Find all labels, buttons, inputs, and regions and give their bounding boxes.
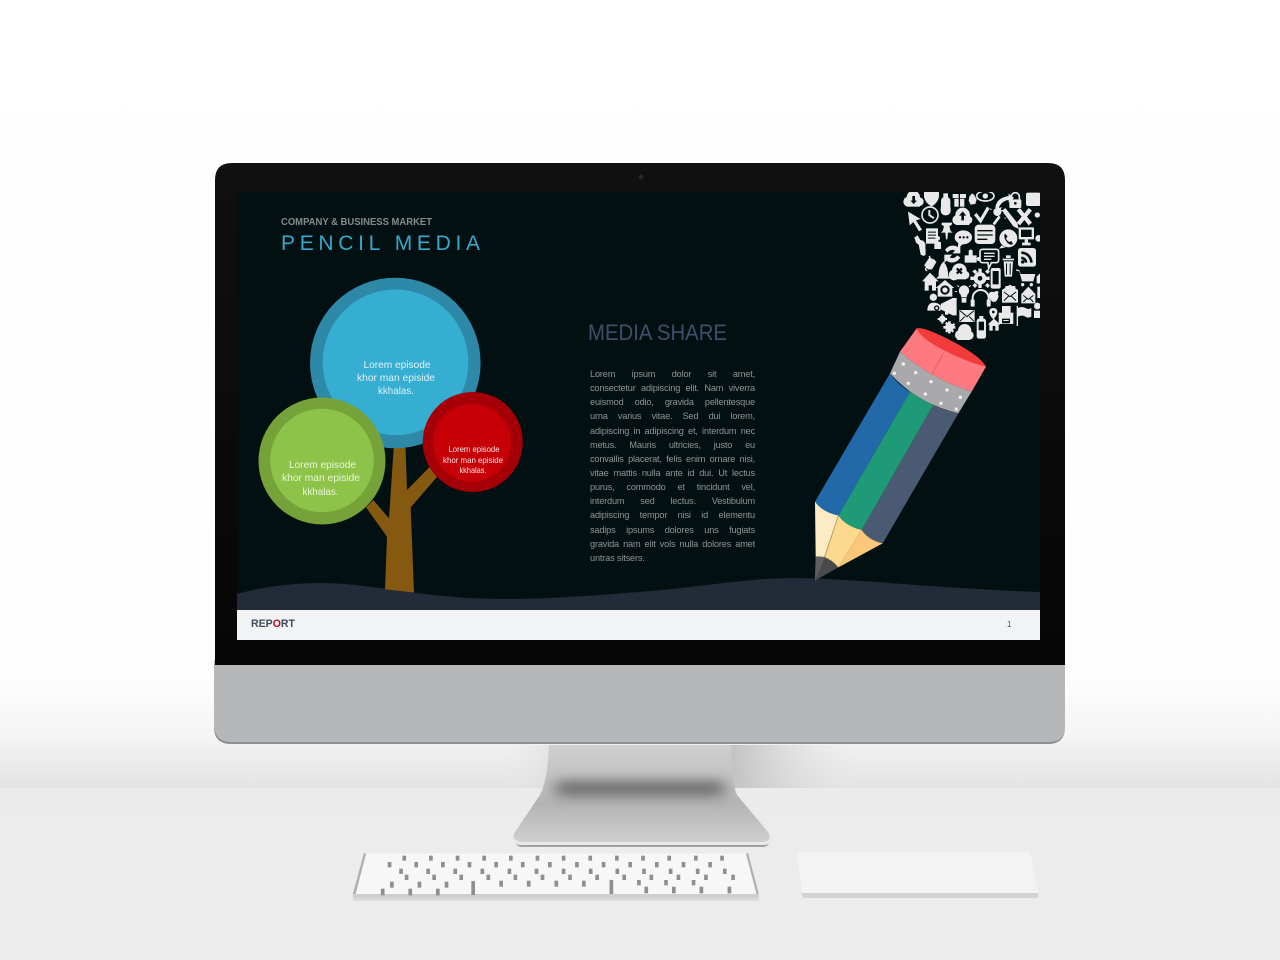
body text: convallis placerat, felis enim ornare nisi, bbox=[590, 454, 755, 464]
icon: pencil bbox=[815, 328, 986, 581]
pencil eraser bbox=[900, 328, 986, 392]
body text: consectetur adipiscing elit. Nam viverra bbox=[590, 383, 755, 393]
section heading: MEDIA SHARE bbox=[588, 320, 727, 345]
stand shadow on wall, right bbox=[730, 745, 865, 788]
pencil wood bbox=[815, 502, 838, 557]
body text: vitae mattis nulla ante id dui. Ut lectus bbox=[590, 468, 755, 478]
monitor stand bbox=[513, 745, 770, 847]
body text: adipiscing tempor nisi id elementu bbox=[590, 510, 755, 520]
circle: blue: khor man episide bbox=[357, 372, 435, 384]
circle: green: Lorem episode bbox=[289, 459, 356, 471]
circle: red: Lorem episode bbox=[448, 444, 500, 454]
body text: metus. Mauris ultricies, justo eu bbox=[590, 440, 755, 450]
webcam bbox=[639, 175, 643, 179]
icon cluster: media icons bbox=[903, 191, 1042, 340]
monitor bezel bbox=[215, 163, 1065, 665]
circle: blue: Lorem episode bbox=[364, 359, 431, 371]
keyboard bbox=[353, 853, 759, 901]
monitor bbox=[214, 163, 1065, 744]
body text: untras sitsers. bbox=[590, 553, 645, 563]
circle: green: khor man episide bbox=[282, 472, 360, 484]
circle: blue bbox=[310, 278, 481, 448]
slide screen bbox=[237, 192, 1040, 610]
pencil body green bbox=[838, 392, 933, 530]
body text: euismod odio, gravida pellentesque bbox=[590, 397, 755, 407]
circle: blue: kkhalas. bbox=[378, 385, 414, 397]
pencil body blue bbox=[815, 373, 910, 516]
body text: interdum sed lectus. Vestibulum bbox=[590, 496, 755, 506]
circle: red bbox=[423, 392, 523, 492]
body text: sadips ipsums dolores uns fugiats bbox=[590, 525, 755, 535]
desk surface bbox=[0, 788, 1280, 960]
pretitle: COMPANY & BUSINESS MARKET bbox=[281, 217, 432, 228]
footer label: REPORT bbox=[251, 618, 295, 630]
body text: adipiscing in adipiscing et, interdum nec bbox=[590, 426, 755, 436]
circle: green: kkhalas. bbox=[302, 486, 338, 498]
tree trunk and branches bbox=[366, 443, 437, 593]
body text: gravida nam elit vols nulla dolores amet bbox=[590, 539, 755, 549]
footer bar bbox=[237, 610, 1040, 640]
page number: 1 bbox=[1007, 620, 1012, 629]
body text: Lorem ipsum dolor sit amet, bbox=[590, 369, 755, 379]
monitor chin bbox=[214, 660, 1065, 744]
stand shadow on wall, left bbox=[500, 745, 550, 788]
pencil lead bbox=[815, 556, 838, 581]
pencil ferrule bbox=[890, 352, 972, 413]
circle: red: khor man episide bbox=[443, 455, 503, 465]
title: PENCIL MEDIA bbox=[281, 232, 480, 255]
trackpad bbox=[797, 852, 1038, 898]
pencil body slate bbox=[862, 405, 958, 543]
body text bbox=[590, 369, 756, 563]
body text: purus, commodo et tincidunt vel, bbox=[590, 482, 755, 492]
body text: urna varius vitae. Sed dui lorem, bbox=[590, 411, 755, 421]
circle: red: kkhalas. bbox=[460, 465, 486, 475]
hills bbox=[237, 578, 1040, 610]
circle: green bbox=[258, 398, 386, 524]
